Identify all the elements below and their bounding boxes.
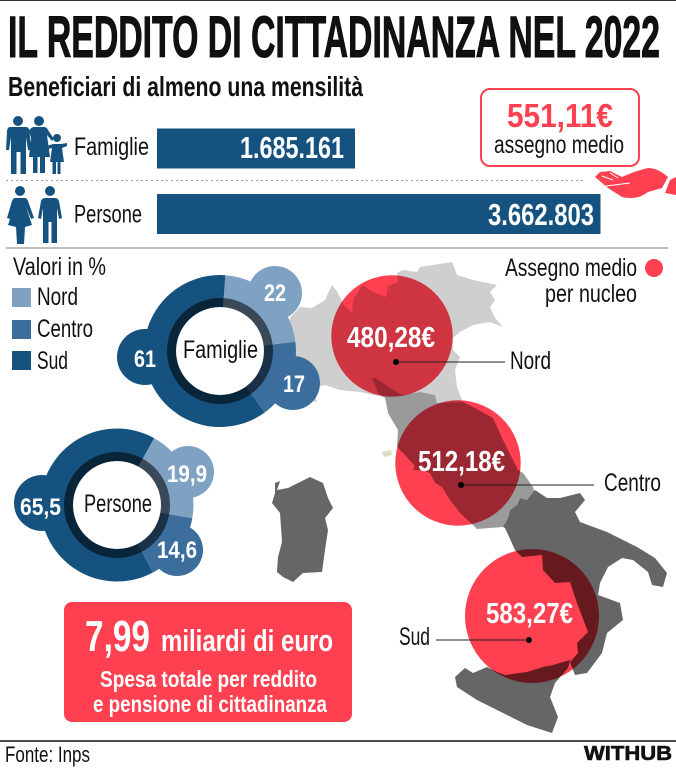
callout: spesa totale: 7,99 xyxy=(85,612,150,661)
icon: family xyxy=(6,116,67,174)
donut chart: Persone: Persone xyxy=(84,490,152,518)
legend: valori in %: Sud xyxy=(37,347,68,375)
label: Famiglie: Famiglie xyxy=(74,133,149,161)
callout: assegno medio xyxy=(481,89,639,166)
callout: spesa totale: e pensione di cittadinanza xyxy=(93,691,327,717)
map: Sud mainland xyxy=(503,490,667,675)
legend: valori in % xyxy=(12,253,106,375)
donut chart: Persone: 19,9 xyxy=(167,461,207,488)
donut chart: Persone: 14,6 xyxy=(157,537,197,564)
legend: valori in %: Centro xyxy=(37,315,93,343)
value: Centro: 512,18€ xyxy=(418,446,505,478)
map: Nord regions xyxy=(285,262,503,403)
map: Sicilia xyxy=(455,660,570,733)
value: Famiglie: 1.685.161 xyxy=(240,130,344,165)
legend: assegno medio per nucleo: per nucleo xyxy=(545,280,637,308)
callout: assegno medio: 551,11€ xyxy=(507,97,613,134)
callout: assegno medio: assegno medio xyxy=(494,131,624,159)
leader: Centro xyxy=(458,469,661,497)
leader: Nord: Nord xyxy=(510,347,551,375)
icon: woman and man xyxy=(7,186,62,244)
map of Italy xyxy=(272,262,667,733)
donut chart: Famiglie: 17 xyxy=(283,371,305,398)
legend: valori in %: Valori in % xyxy=(13,253,106,281)
legend: valori in %: Nord xyxy=(37,283,78,311)
donut chart: Persone xyxy=(14,428,214,581)
donut chart: Famiglie: 61 xyxy=(134,346,156,373)
subtitle: Beneficiari di almeno una mensilità xyxy=(8,71,363,102)
donut chart: Famiglie xyxy=(117,266,320,427)
donut chart: Persone: 65,5 xyxy=(20,494,61,521)
value: Sud: 583,27€ xyxy=(486,598,573,630)
leader: Nord xyxy=(393,347,551,375)
bar: Persone xyxy=(157,194,600,234)
circle: Sud xyxy=(465,549,599,683)
callout: spesa totale: miliardi di euro xyxy=(161,623,333,658)
legend: assegno medio per nucleo xyxy=(505,254,663,308)
donut chart: Famiglie: Famiglie xyxy=(183,336,258,364)
callout: spesa totale xyxy=(64,602,352,722)
map: Elba xyxy=(382,450,392,457)
icon: open hand xyxy=(595,168,676,198)
legend: assegno medio per nucleo: Assegno medio xyxy=(505,254,637,282)
circle: Centro xyxy=(395,400,521,526)
value: Nord: 480,28€ xyxy=(347,322,435,354)
bar: Famiglie xyxy=(157,128,355,168)
leader: Sud: Sud xyxy=(399,623,430,651)
map: Centro regions xyxy=(372,378,535,529)
circle: Nord xyxy=(331,275,453,397)
donut chart: Famiglie: 22 xyxy=(264,280,286,307)
callout: spesa totale: Spesa totale per reddito xyxy=(100,666,317,692)
label: Persone: Persone xyxy=(74,200,142,228)
logo: WITHUB: WITHUB xyxy=(584,743,672,765)
value: Persone: 3.662.803 xyxy=(488,197,594,232)
map: Sardegna xyxy=(272,477,333,582)
source: Fonte: Inps xyxy=(5,742,90,767)
leader: Sud xyxy=(399,623,532,651)
